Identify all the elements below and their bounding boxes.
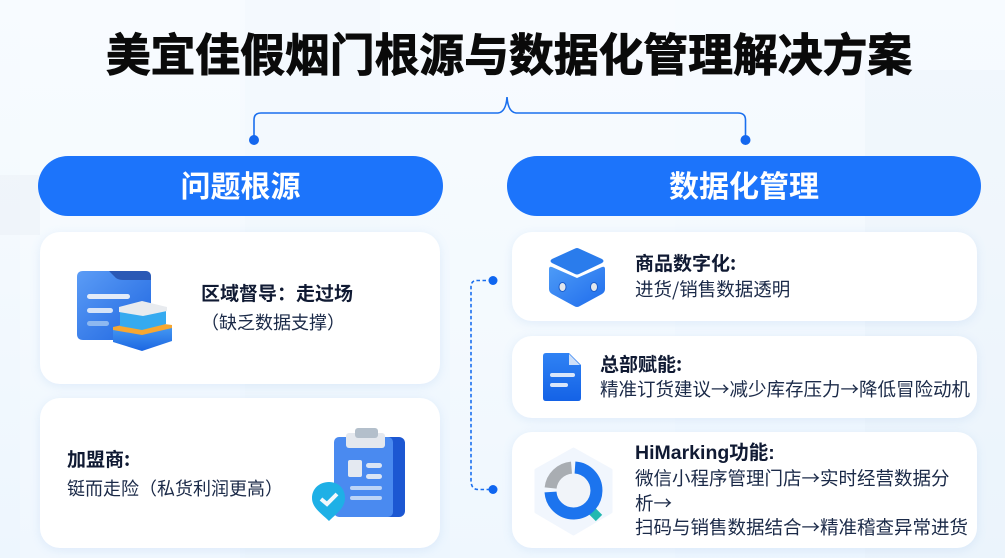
text: 总部赋能 [600, 350, 970, 402]
dashed connector [470, 276, 498, 494]
bracket connector [249, 97, 750, 145]
text: 商品数字化: 商品数字化: [635, 249, 736, 276]
heading pill: 数据化管理 [507, 156, 981, 216]
text: 区域督导 [201, 279, 353, 335]
panel: 商品数字化 [512, 232, 977, 321]
text: HiMarking功能: HiMarking功能: [635, 442, 775, 464]
icon: folder with stacked layers [77, 271, 172, 351]
text: 商品数字化 [635, 249, 790, 302]
text: HiMarking功能: 微信小程序管理门店→实时经营数据分 [635, 465, 950, 491]
panel: 加盟商 [40, 398, 440, 548]
text: 总部赋能: 精准订货建议→减少库存压力→降低冒险动机 [600, 376, 970, 402]
text: HiMarking功能: 析→ [635, 490, 672, 516]
panel: HiMarking功能 [512, 432, 977, 548]
text: 商品数字化: 进货/销售数据透明 [635, 276, 790, 302]
text: HiMarking功能: 扫码与销售数据结合→精准稽查异常进货 [635, 514, 968, 540]
text: 加盟商: 加盟商: [67, 445, 130, 472]
heading pill: 问题根源 [38, 156, 443, 216]
text: 区域督导: 区域督导：走过场 [201, 279, 353, 306]
panel: 区域督导 [40, 232, 440, 384]
title: 美宜佳假烟门根源与数据化管理解决方案 [106, 31, 912, 81]
icon: clipboard with check badge [312, 428, 405, 521]
text: HiMarking功能 [635, 442, 968, 540]
text: 区域督导: （缺乏数据支撑） [201, 309, 345, 335]
heading pill: 数据化管理: 数据化管理 [669, 171, 819, 204]
heading pill: 问题根源: 问题根源 [180, 171, 300, 204]
icon: document [543, 353, 581, 401]
text: 加盟商 [67, 445, 283, 501]
text: 总部赋能: 总部赋能: [600, 350, 682, 377]
panel: 总部赋能 [512, 336, 977, 418]
text: 加盟商: 铤而走险（私货利润更高） [67, 475, 283, 501]
icon: cube [549, 248, 605, 307]
icon: donut chart with magnifier [534, 448, 612, 536]
